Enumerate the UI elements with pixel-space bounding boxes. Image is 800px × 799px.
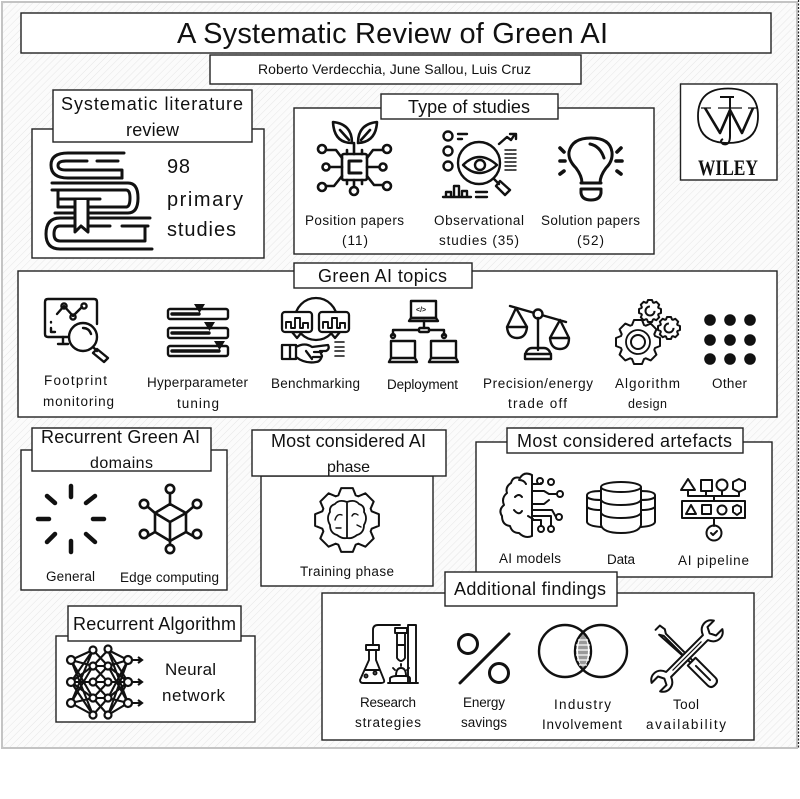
panel: recurrent green ai domains: [21, 427, 227, 590]
icon: precision energy balance: [507, 306, 569, 359]
panel: most considered ai phase: [252, 430, 446, 586]
icon: tools: [648, 617, 726, 695]
icon: hyperparameter tuning: [168, 304, 228, 356]
text: footprint monitoring: monitoring: [43, 394, 114, 409]
text: energy savings: [461, 695, 507, 730]
icon: percent sign: [458, 634, 509, 683]
heading: recurrent algorithm: [68, 606, 241, 641]
heading: green ai topics: [294, 263, 472, 288]
text: precision energy trade off: [483, 376, 593, 411]
text: neural network: [162, 660, 226, 705]
text: energy savings: Energy: [463, 695, 505, 710]
text: position papers: [305, 213, 404, 248]
icon: stack of books: [46, 153, 152, 249]
text: general: General: [46, 569, 95, 584]
text: deployment: Deployment: [387, 377, 458, 392]
heading: additional findings: Additional findings: [454, 579, 606, 599]
heading: systematic literature review: Systematic literature: [61, 94, 243, 114]
text: training phase: Training phase: [300, 564, 394, 579]
icon: neural network: [67, 646, 142, 718]
text: edge computing: Edge computing: [120, 570, 219, 585]
icon: data stacks: [587, 482, 655, 533]
icon: footprint monitoring: [45, 299, 108, 362]
icon: chip with leaves: [318, 122, 391, 195]
text: algorithm design: Algorithm: [615, 376, 680, 391]
text: precision energy trade off: Precision/energy: [483, 376, 593, 391]
text: industry involvement: Industry: [554, 697, 611, 712]
text: 98 primary studies: studies: [167, 219, 236, 241]
heading: recurrent green ai domains: Recurrent Green AI: [41, 427, 200, 447]
panel: wiley logo: WILEY: [698, 155, 758, 180]
text: ai pipeline: AI pipeline: [678, 553, 749, 568]
icon: benchmarking: [282, 298, 349, 362]
text: energy savings: savings: [461, 715, 507, 730]
text: neural network: network: [162, 686, 226, 705]
heading: systematic literature review: [53, 90, 252, 142]
text: observational studies: Observational: [434, 213, 524, 228]
text: algorithm design: design: [628, 397, 667, 411]
icon: deployment: [389, 301, 458, 362]
text: observational studies: [434, 213, 524, 248]
heading: most considered ai phase: phase: [327, 459, 370, 476]
icon: light bulb: [560, 138, 622, 200]
title: [21, 13, 771, 53]
text: ai models: AI models: [499, 551, 561, 566]
heading: type of studies: [381, 94, 558, 119]
text: benchmarking: Benchmarking: [271, 376, 360, 391]
heading: most considered artefacts: Most considered artefacts: [517, 431, 732, 451]
heading: green ai topics: Green AI topics: [318, 266, 447, 286]
heading: additional findings: [445, 572, 617, 606]
text: data: Data: [607, 552, 635, 567]
authors: [210, 55, 581, 84]
heading: type of studies: Type of studies: [408, 97, 530, 117]
panel: type of studies: [294, 94, 654, 254]
text: research strategies: strategies: [355, 715, 421, 730]
text: footprint monitoring: Footprint: [44, 373, 107, 388]
text: 98 primary studies: 98: [167, 156, 190, 178]
text: position papers: (11): [342, 233, 368, 248]
text: 98 primary studies: [167, 156, 243, 241]
heading: recurrent green ai domains: domains: [90, 455, 153, 472]
icon: lab equipment: [360, 625, 418, 683]
panel: additional findings: [322, 572, 754, 740]
icon: algorithm gears: [616, 300, 680, 364]
heading: recurrent green ai domains: [32, 427, 211, 472]
icon: magnifier with eye: [443, 132, 516, 197]
text: algorithm design: [615, 376, 680, 411]
icon: venn diagram: [539, 625, 627, 677]
text: solution papers: Solution papers: [541, 213, 640, 228]
heading: systematic literature review: review: [126, 120, 180, 140]
text: observational studies: studies (35): [439, 233, 519, 248]
heading: most considered ai phase: Most considered AI: [271, 431, 426, 451]
text: hyperparameter tuning: [147, 375, 248, 411]
text: tool availability: [646, 697, 726, 732]
text: solution papers: [541, 213, 640, 248]
text: other: Other: [712, 376, 748, 391]
icon: brain in gear: [315, 488, 379, 552]
title: A Systematic Review of Green AI: [177, 18, 608, 50]
text: footprint monitoring: [43, 373, 114, 409]
text: solution papers: (52): [577, 233, 604, 248]
text: research strategies: Research: [360, 695, 416, 710]
icon: edge computing cube: [140, 485, 201, 553]
icon: deployment: </>: [416, 307, 426, 314]
text: hyperparameter tuning: Hyperparameter: [147, 375, 248, 390]
panel: wiley logo: [680, 84, 777, 180]
text: industry involvement: [542, 697, 622, 732]
text: hyperparameter tuning: tuning: [177, 396, 219, 411]
panel: most considered artefacts: [476, 428, 772, 577]
text: position papers: Position papers: [305, 213, 404, 228]
text: 98 primary studies: primary: [167, 189, 243, 211]
authors: Roberto Verdecchia, June Sallou, Luis Cruz: [258, 61, 531, 77]
text: neural network: Neural: [165, 660, 216, 679]
panel: systematic literature review: [32, 90, 264, 258]
text: precision energy trade off: trade off: [508, 396, 567, 411]
heading: most considered ai phase: [252, 430, 446, 476]
text: tool availability: Tool: [673, 697, 699, 712]
panel: recurrent algorithm: [56, 606, 255, 722]
text: tool availability: availability: [646, 717, 726, 732]
icon: general spinner: [38, 486, 104, 552]
text: industry involvement: Involvement: [542, 717, 622, 732]
text: research strategies: [355, 695, 421, 730]
icon: other dots: [704, 314, 756, 365]
icon: wiley emblem: [698, 88, 758, 144]
icon: ai pipeline: [681, 479, 745, 540]
heading: recurrent algorithm: Recurrent Algorithm: [73, 614, 236, 634]
panel: green ai topics: [18, 263, 777, 417]
icon: ai brain circuit: [500, 474, 563, 537]
